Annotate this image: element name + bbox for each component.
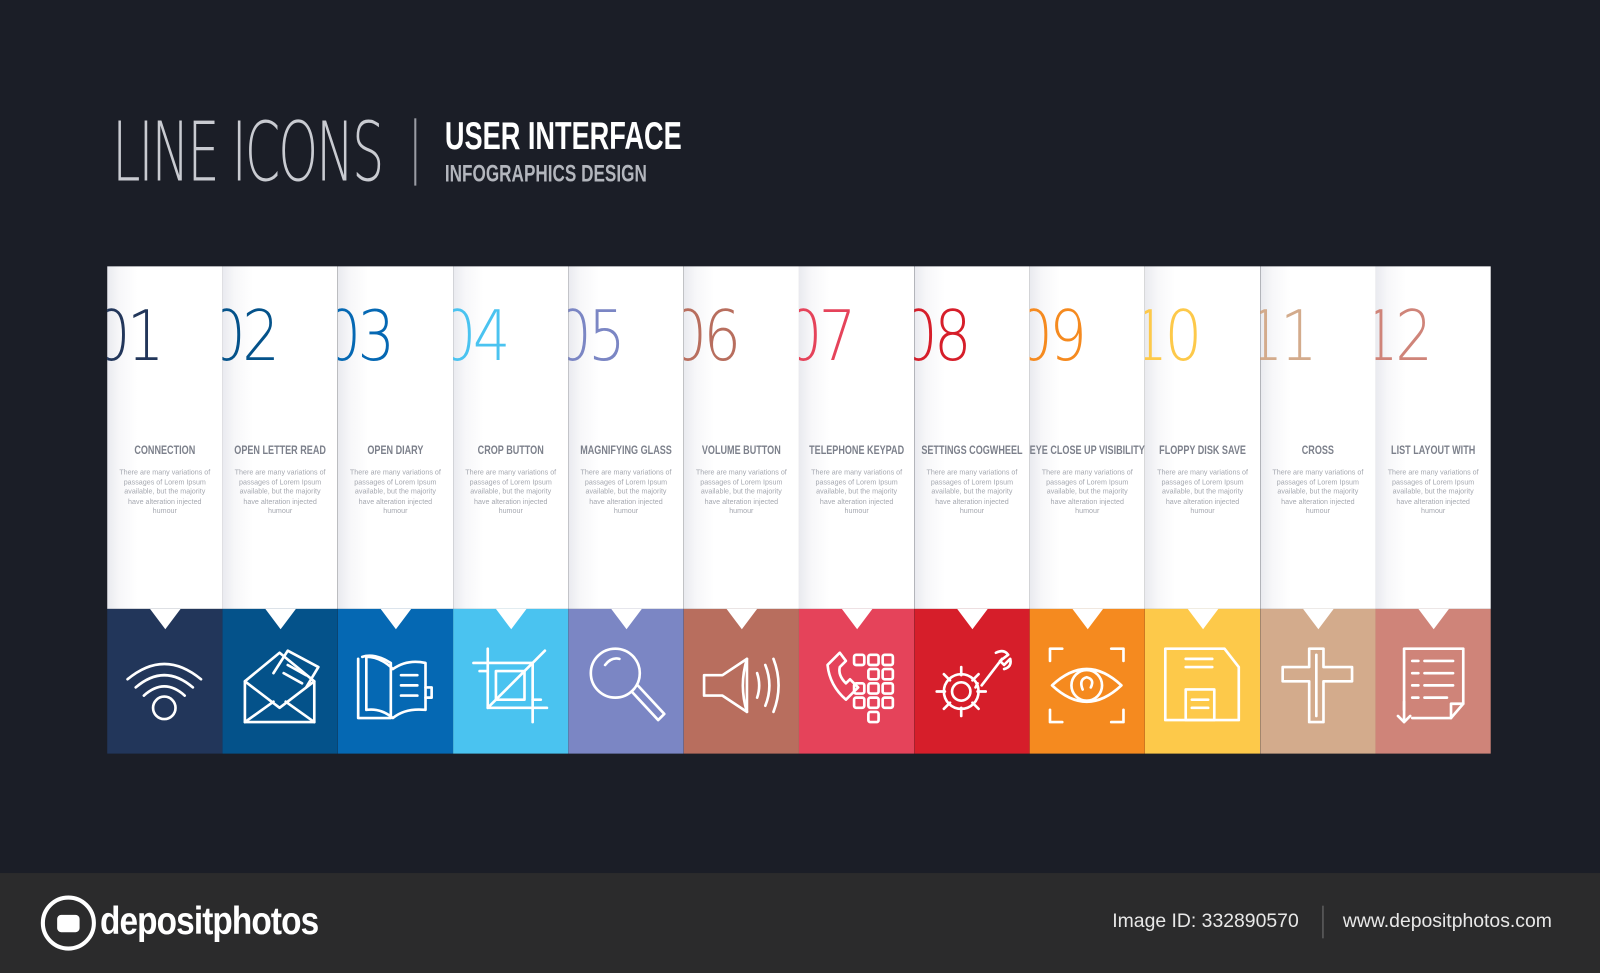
column 6: VOLUME BUTTON	[702, 443, 781, 457]
column 10	[1144, 266, 1260, 754]
column 7: There are many variations of passages of Lorem Ipsum available, but the majority have alteration injected humour	[811, 469, 902, 515]
column 1: There are many variations of passages of Lorem Ipsum available, but the majority have alteration injected humour	[119, 469, 210, 515]
icon: list	[1396, 647, 1465, 724]
column 12	[1376, 266, 1491, 754]
column 5	[568, 266, 684, 754]
column 4	[453, 266, 568, 754]
logo	[40, 896, 318, 951]
column 4: CROP BUTTON	[478, 443, 544, 457]
image id: Image ID: 332890570	[1112, 911, 1299, 932]
column 2	[222, 266, 338, 754]
column 3: There are many variations of passages of Lorem Ipsum available, but the majority have alteration injected humour	[350, 469, 441, 515]
column 8: There are many variations of passages of Lorem Ipsum available, but the majority have alteration injected humour	[926, 469, 1017, 515]
column 11: There are many variations of passages of Lorem Ipsum available, but the majority have alteration injected humour	[1272, 469, 1363, 515]
column 2: OPEN LETTER READ	[234, 443, 326, 457]
title: USER INTERFACE	[445, 115, 682, 158]
icon: crop	[472, 647, 548, 724]
column 12: LIST LAYOUT WITH	[1391, 443, 1475, 457]
logo: depositphotos	[100, 901, 318, 943]
footer bar: www.depositphotos.com	[1343, 911, 1552, 932]
column 5: MAGNIFYING GLASS	[580, 443, 672, 457]
icon: open diary	[356, 654, 433, 720]
column 10: FLOPPY DISK SAVE	[1159, 443, 1246, 457]
column 3	[338, 266, 453, 754]
icon: magnifier	[590, 647, 666, 722]
column 1: CONNECTION	[134, 443, 195, 457]
column 3: OPEN DIARY	[367, 443, 423, 457]
column 10: There are many variations of passages of Lorem Ipsum available, but the majority have alteration injected humour	[1157, 469, 1248, 515]
column 5: There are many variations of passages of Lorem Ipsum available, but the majority have alteration injected humour	[581, 469, 671, 515]
column 2: There are many variations of passages of Lorem Ipsum available, but the majority have alteration injected humour	[235, 469, 326, 515]
column 9: There are many variations of passages of Lorem Ipsum available, but the majority have alteration injected humour	[1042, 469, 1133, 515]
title: INFOGRAPHICS DESIGN	[445, 160, 647, 188]
column 7: TELEPHONE KEYPAD	[809, 443, 904, 457]
footer bar	[0, 873, 1600, 973]
column 12: There are many variations of passages of Lorem Ipsum available, but the majority have alteration injected humour	[1388, 469, 1479, 515]
title: LINE ICONS	[112, 105, 382, 200]
column 1	[107, 266, 222, 754]
icon: wifi	[126, 662, 202, 720]
column 11: CROSS	[1302, 443, 1334, 457]
icon: eye	[1048, 647, 1125, 724]
icon: settings	[935, 650, 1012, 718]
column 7	[799, 266, 914, 754]
icon: cross	[1281, 647, 1354, 724]
icon: volume	[702, 658, 780, 714]
column 9	[1030, 266, 1145, 754]
icon: open letter	[244, 649, 320, 724]
column 6	[684, 266, 799, 754]
icon: floppy	[1164, 647, 1240, 722]
column 9: EYE CLOSE UP VISIBILITY	[1030, 443, 1145, 457]
title	[112, 105, 682, 200]
column 8	[914, 266, 1030, 754]
column 11	[1260, 266, 1376, 754]
icon: telephone keypad	[826, 651, 894, 724]
column 8: SETTINGS COGWHEEL	[921, 443, 1023, 457]
column 4: There are many variations of passages of Lorem Ipsum available, but the majority have alteration injected humour	[465, 469, 556, 515]
column 6: There are many variations of passages of Lorem Ipsum available, but the majority have alteration injected humour	[696, 469, 787, 515]
